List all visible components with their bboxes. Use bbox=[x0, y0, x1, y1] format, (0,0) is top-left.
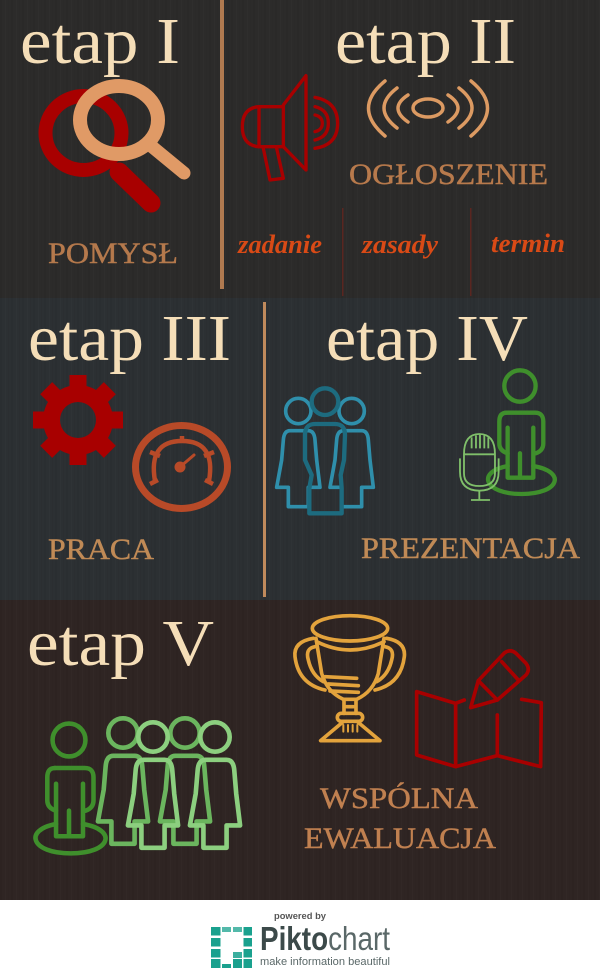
icon: group of three people bbox=[277, 388, 373, 513]
icon: trophy bbox=[295, 616, 404, 741]
icon: gear bbox=[33, 375, 123, 465]
panel: footer bbox=[0, 900, 600, 980]
label: zasady: zasady bbox=[361, 230, 438, 259]
icon: megaphone bbox=[242, 76, 338, 180]
label: PRACA: PRACA bbox=[48, 533, 154, 566]
heading: etap I: etap I bbox=[20, 5, 180, 78]
panel: background middle bbox=[0, 298, 600, 600]
icon: person on base bbox=[35, 724, 106, 853]
heading: etap IV: etap IV bbox=[326, 302, 528, 375]
logo: Piktochart icon bbox=[211, 927, 252, 968]
label: PREZENTACJA: PREZENTACJA bbox=[361, 532, 580, 565]
heading: etap V: etap V bbox=[27, 607, 214, 680]
label: OGŁOSZENIE: OGŁOSZENIE bbox=[349, 158, 548, 191]
logo: Piktochart wordmark: Piktochart bbox=[260, 920, 390, 957]
icon: speedometer bbox=[136, 426, 228, 508]
icon: map with pencil bbox=[417, 651, 541, 767]
label: zadanie: zadanie bbox=[237, 230, 322, 259]
panel: background bottom bbox=[0, 600, 600, 900]
heading: etap II: etap II bbox=[335, 5, 516, 78]
heading: etap III: etap III bbox=[28, 302, 231, 375]
icon: speaker with microphone bbox=[460, 370, 555, 500]
label: POMYSŁ: POMYSŁ bbox=[48, 237, 178, 270]
icon: broadcast signal bbox=[368, 81, 488, 136]
label: termin: termin bbox=[491, 229, 565, 258]
footer text: powered by: powered by bbox=[274, 911, 327, 922]
label: WSPÓLNA: WSPÓLNA bbox=[320, 782, 478, 815]
icon: magnifying glasses bbox=[46, 86, 184, 203]
logo: tagline: make information beautiful bbox=[260, 956, 390, 968]
icon: group of four people bbox=[98, 718, 240, 848]
panel: background top bbox=[0, 0, 600, 298]
label: EWALUACJA: EWALUACJA bbox=[304, 822, 496, 855]
